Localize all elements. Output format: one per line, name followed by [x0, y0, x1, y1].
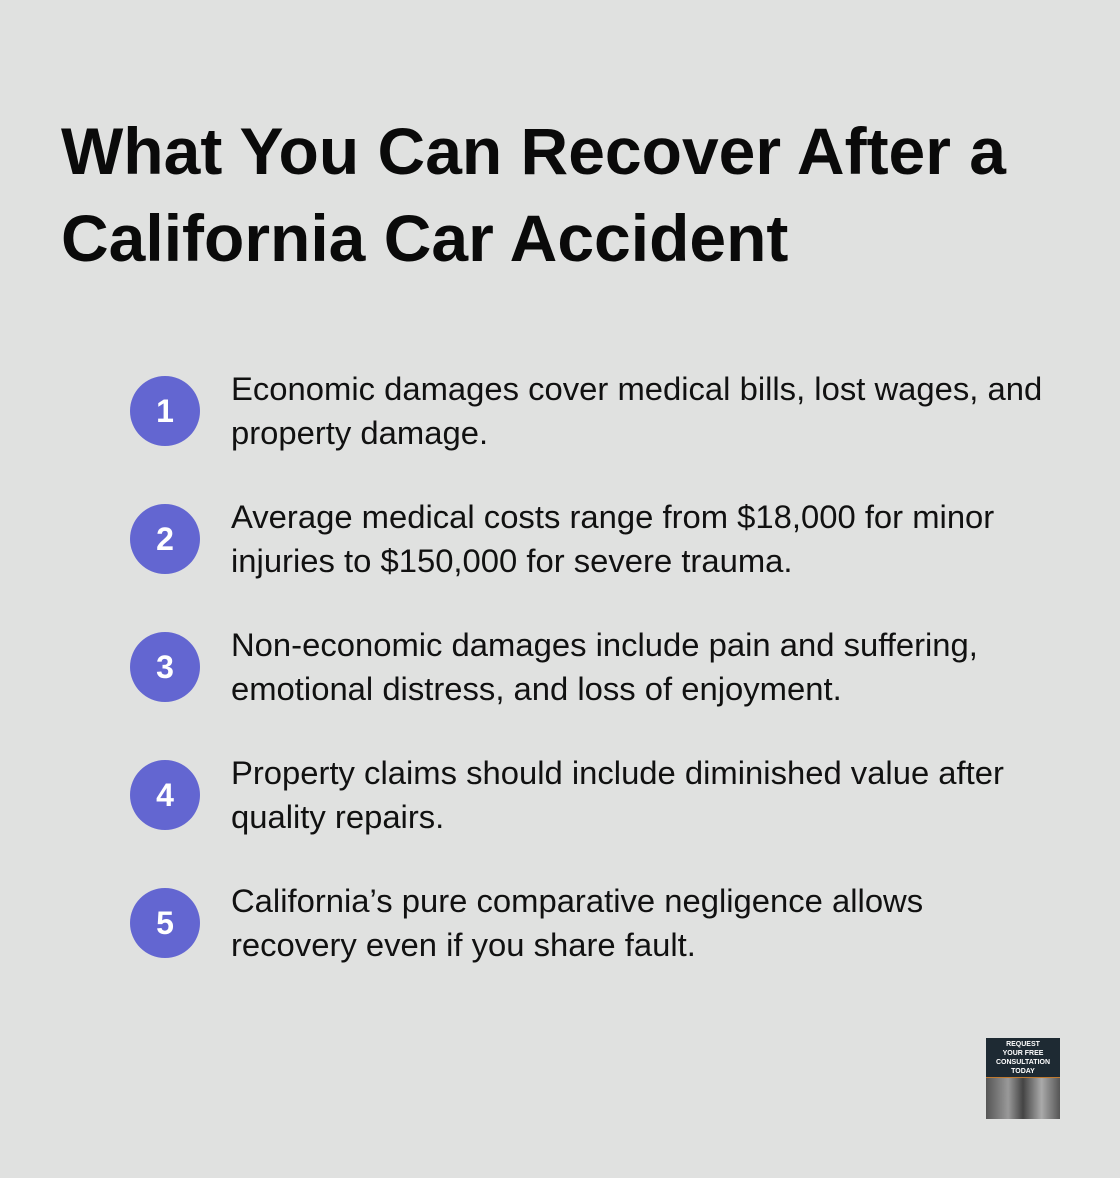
text 4: quality repairs. — [231, 798, 444, 835]
text 4 — [231, 754, 1004, 835]
text 4: Property claims should include diminished value after — [231, 754, 1004, 791]
badge 5 — [130, 888, 200, 958]
logo: consultation badge — [986, 1038, 1060, 1117]
badge 2 — [130, 504, 200, 574]
text 5: recovery even if you share fault. — [231, 926, 696, 963]
badge 4: 4 — [156, 777, 174, 813]
title: What You Can Recover After a — [61, 114, 1006, 188]
text 1: property damage. — [231, 414, 488, 451]
text 1: Economic damages cover medical bills, lost wages, and — [231, 370, 1042, 407]
item 3 — [130, 626, 978, 707]
item 4 — [130, 754, 1004, 835]
text 2: Average medical costs range from $18,000 for minor — [231, 498, 994, 535]
item 1 — [130, 370, 1042, 451]
text 5 — [231, 882, 923, 963]
logo: consultation badge: YOUR FREE — [1003, 1050, 1043, 1057]
logo: consultation badge: TODAY — [1011, 1068, 1035, 1075]
text 2: injuries to $150,000 for severe trauma. — [231, 542, 793, 579]
badge 4 — [130, 760, 200, 830]
title — [61, 114, 1006, 275]
text 3: Non-economic damages include pain and suffering, — [231, 626, 978, 663]
text 1 — [231, 370, 1042, 451]
badge 1: 1 — [156, 393, 174, 429]
badge 3 — [130, 632, 200, 702]
item 2 — [130, 498, 994, 579]
text 3: emotional distress, and loss of enjoyment. — [231, 670, 842, 707]
item 5 — [130, 882, 923, 963]
text 2 — [231, 498, 994, 579]
title: California Car Accident — [61, 201, 788, 275]
badge 3: 3 — [156, 649, 174, 685]
badge 1 — [130, 376, 200, 446]
logo: consultation badge: CONSULTATION — [996, 1059, 1050, 1066]
text 3 — [231, 626, 978, 707]
badge 2: 2 — [156, 521, 174, 557]
logo: consultation badge: REQUEST — [1006, 1041, 1040, 1048]
badge 5: 5 — [156, 905, 174, 941]
text 5: California’s pure comparative negligence allows — [231, 882, 923, 919]
